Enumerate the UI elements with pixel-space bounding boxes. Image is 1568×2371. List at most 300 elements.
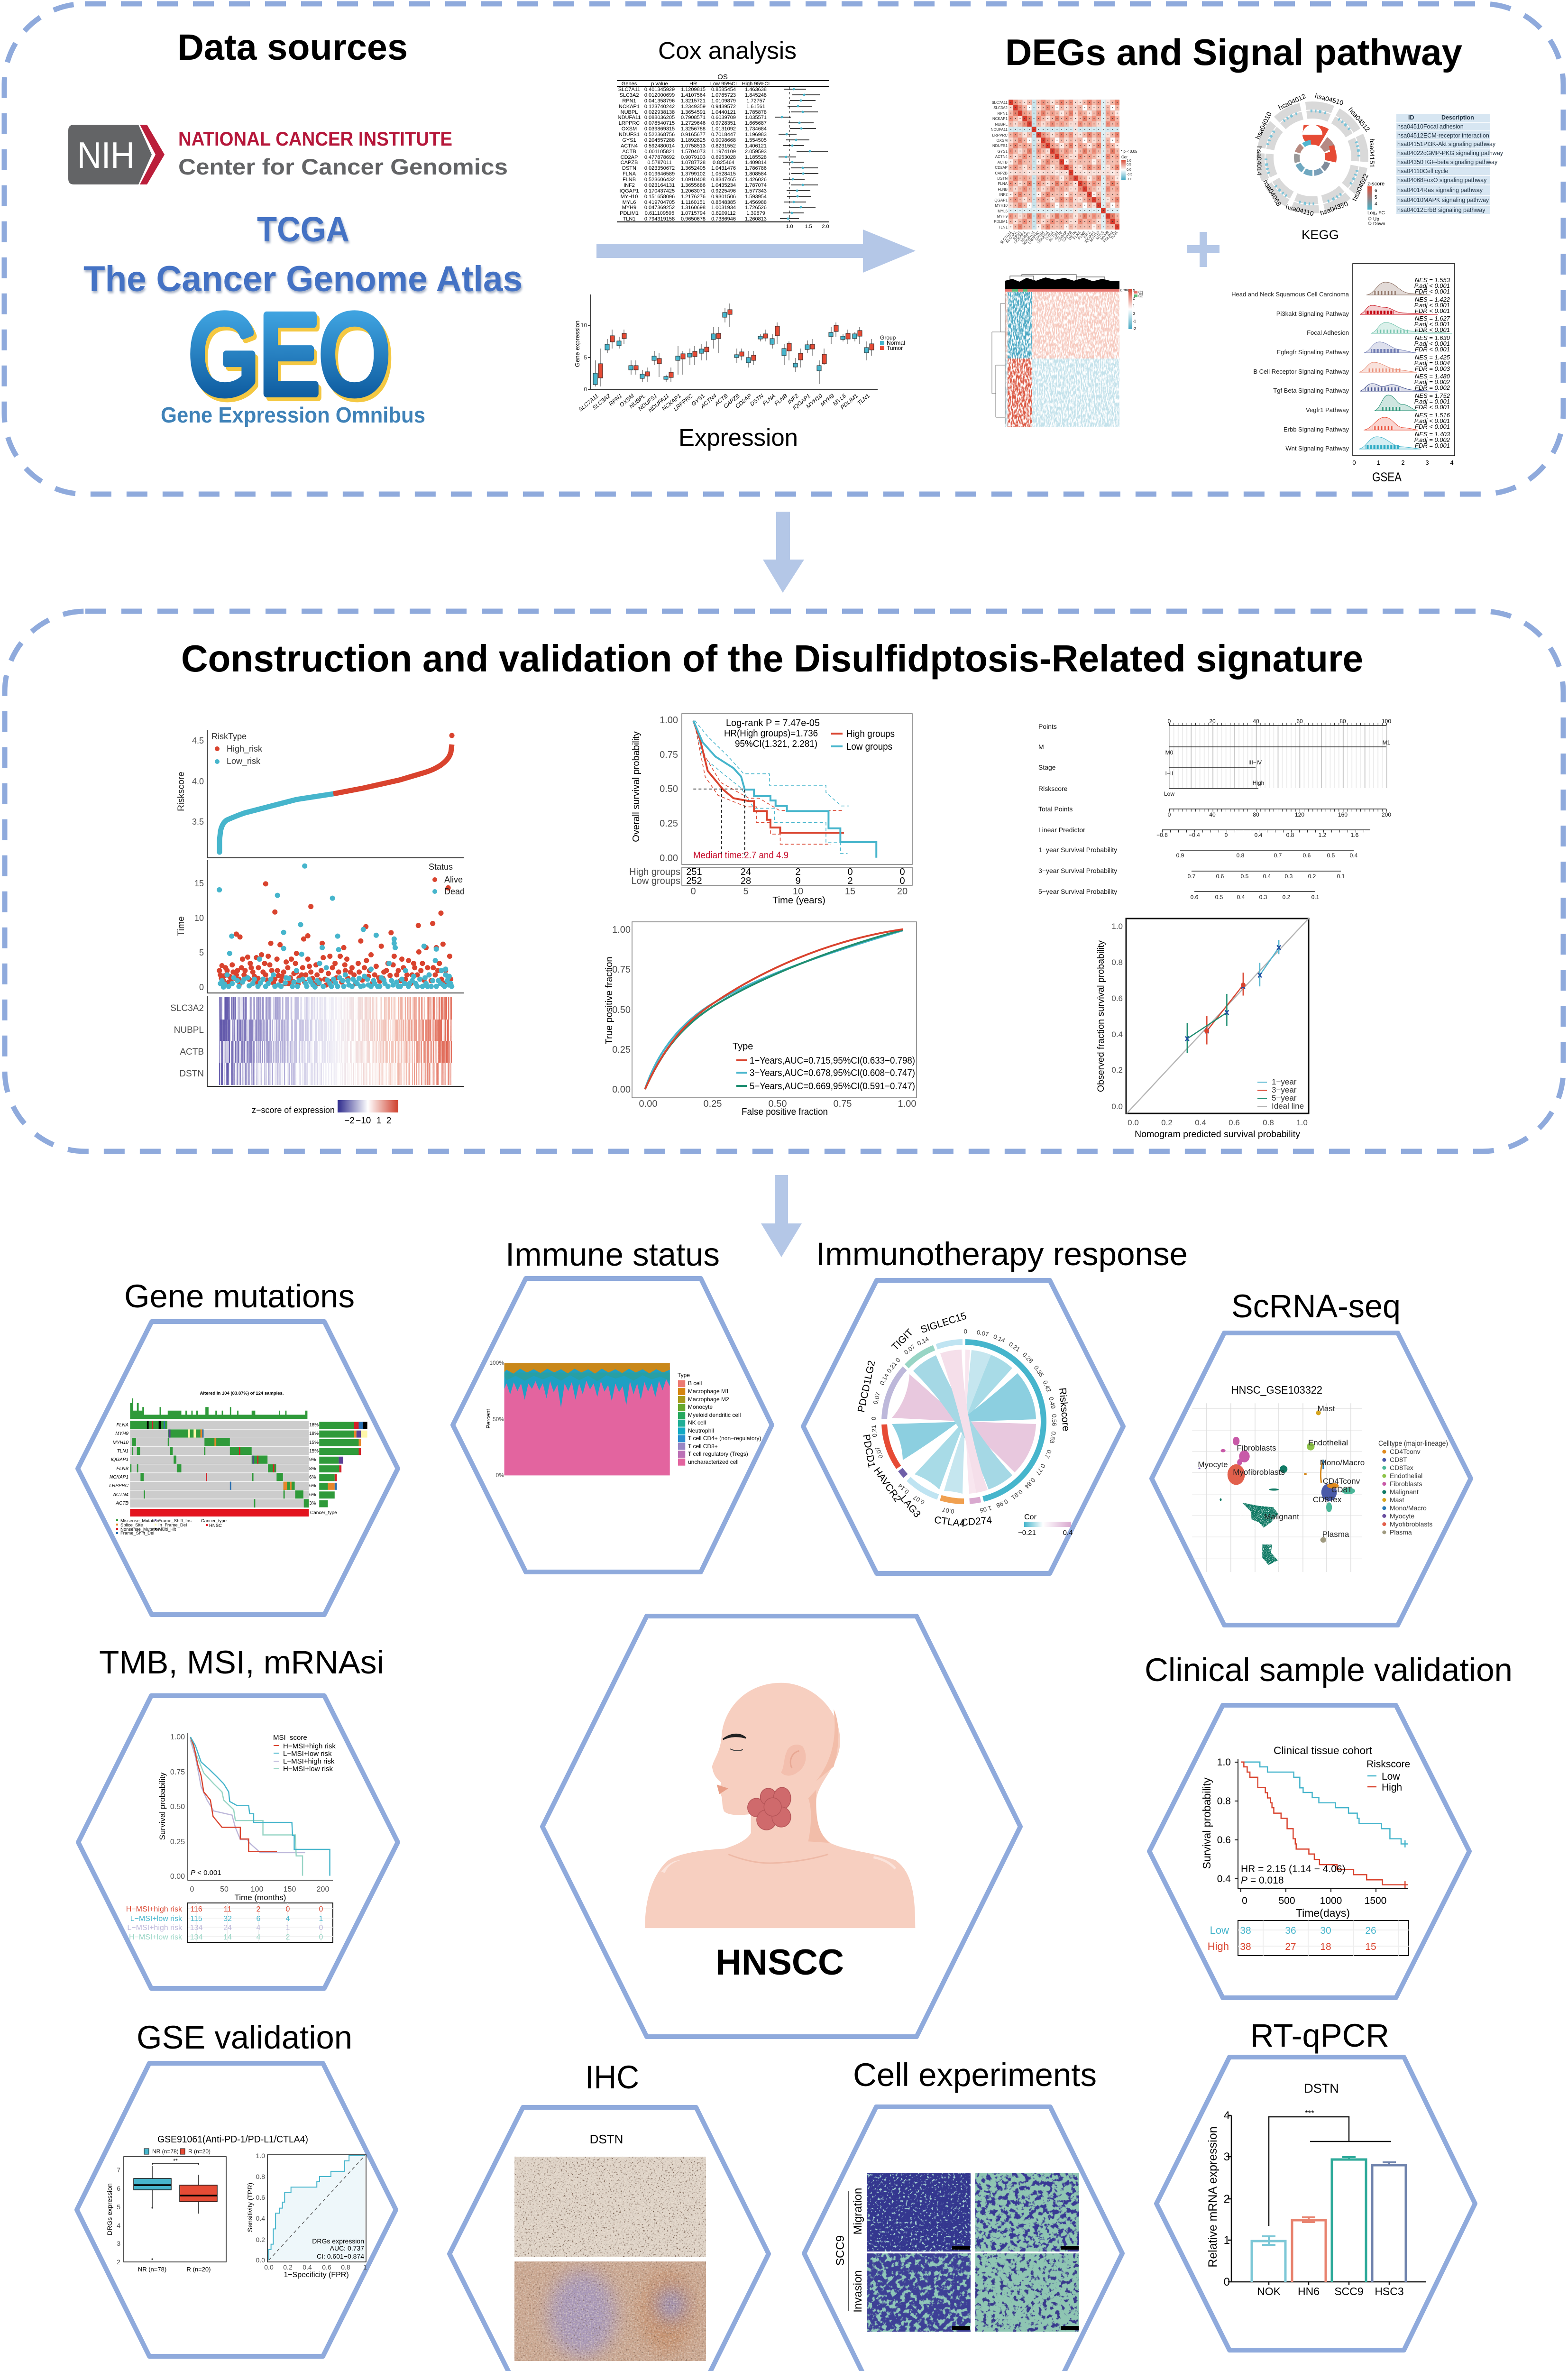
heading: Immune status [505,1236,720,1273]
chart: clustered expression heatmap: C1 [1138,290,1144,294]
table: Cox forest plot: 0.8209112 [711,211,736,216]
chart: riskscore curve: Low_risk [227,756,261,766]
chart: clustered expression heatmap [992,275,1144,427]
table: Cox forest plot: 0.9650678 [681,216,706,222]
chart: Kaplan-Meier overall survival: 1.00 [660,715,678,726]
chart: stacked immune composition: Myeloid dendritic cell [688,1412,741,1418]
chart: nomogram: 0.3 [1285,873,1293,880]
chart: MSI survival: Time (months) [235,1893,286,1902]
chart: GSEA ridge plot: Tgf Beta Signaling Pathway [1273,387,1349,394]
chart: GSEA ridge plot: P.adj = 0.004 [1414,359,1450,367]
chart: MSI survival: L−MSI+low risk [283,1750,332,1758]
chart: expression box plot: LRPPRC [672,392,694,413]
chart: Kaplan-Meier overall survival: HR(High groups)=1.736 [724,728,818,739]
chart: oncoplot: Altered in 104 (83.87%) of 124 samples. [200,1391,284,1396]
table: Cox forest plot: ACTN4 [621,143,638,149]
panel: HNSCC centre [542,1616,1020,2037]
chart: correlation heatmap: OXSM [1034,230,1045,241]
chart: survival time scatter: Time [176,916,186,936]
chart: MSI survival: 0.00 [170,1873,185,1881]
heading: TMB, MSI, mRNAsi [99,1644,384,1681]
chart: GSEA ridge plot: NES = 1.425 [1415,354,1450,361]
image: high staining tissue [514,2261,706,2361]
chart: nomogram: Riskscore [1038,785,1068,792]
chart: UMAP clusters: Plasma [1390,1528,1412,1536]
chart: UMAP clusters: Fibroblasts [1237,1443,1276,1452]
chart: clinical cohort survival: P = 0.018 [1241,1875,1284,1886]
chart: chord diagram: 0.21 [1008,1341,1021,1353]
table: KEGG pathways: Description [1441,114,1474,121]
table: Cox forest plot: ACTB [622,149,636,155]
arrow: down to signature panel [763,512,804,593]
chart: nomogram: Stage [1038,763,1056,771]
chart: nomogram: Linear Predictor [1038,826,1085,834]
chart: KEGG circle plot [1254,92,1385,227]
chart: nomogram: 0 [1168,718,1171,725]
chart: chord diagram: PDCD1 [861,1434,877,1469]
table: Cox forest plot: 0.7908571 [681,115,706,120]
table: Cox forest plot: 1.61561 [746,104,765,110]
chart: GSEA ridge plot: P.adj = 0.002 [1414,378,1450,386]
chart: correlation heatmap: CD2AP [1056,230,1068,243]
chart: MSI survival: 1.00 [170,1733,185,1741]
logo text: TCGA [83,210,523,299]
table: Cox forest plot: 0.019646589 [644,171,675,177]
chart: correlation heatmap: TLN1 [1110,230,1119,240]
chart: UMAP clusters: CD4Tconv [1323,1477,1360,1486]
hexagon frame [78,1696,398,1988]
table: Cox forest plot: NDUFS1 [619,132,640,138]
chart: nomogram: Low [1164,790,1174,797]
chart: GSEA ridge plot: FDR < 0.001 [1415,423,1450,430]
chart: GSE91061 box plot and ROC: AUC: 0.737 [330,2244,364,2252]
chart: KEGG circle plot: 6 [1375,188,1377,193]
chart: expression stripe heatmap: SLC3A2 [170,1003,204,1013]
table: Cox forest plot: 1.0031934 [711,205,736,211]
chart: GSE91061 box plot and ROC: GSE91061(Anti-PD-1/PD-L1/CTLA4) [157,2134,308,2145]
chart: clinical cohort survival: High [1382,1782,1402,1793]
chart: DSTN relative expression: NOK [1257,2285,1281,2297]
chart: calibration curve: 0.6 [1229,1118,1240,1127]
logo: NIH National Cancer Institute: NIH [77,134,135,176]
chart: oncoplot: Cancer_type [310,1510,337,1516]
chart: DSTN relative expression: DSTN [1304,2081,1339,2095]
chart: DSTN relative expression [1206,2081,1426,2297]
table: Cox forest plot: 1.5 [805,224,812,230]
hexagon frame [803,1280,1123,1573]
chart: nomogram: M1 [1383,739,1391,746]
image: transwell assay grid: Migration [852,2188,864,2234]
chart: expression box plot: ACTB [713,393,729,408]
chart: Kaplan-Meier overall survival: 0.75 [660,750,678,760]
chart: MSI survival: Survival probability [158,1772,167,1840]
chart: chord diagram: 0.07 [874,1446,884,1460]
chart: time-dependent ROC [604,922,917,1117]
table: Cox forest plot: 1.593954 [745,194,767,200]
table: Cox forest plot: TLN1 [623,216,635,222]
heading: DEGs and Signal pathway: DEGs and Signal pathway [1005,31,1462,73]
chart: GSEA ridge plot: FDR = 0.003 [1415,365,1450,372]
table: Cox forest plot: 0.9728351 [711,120,736,126]
chart: clinical cohort survival: 15 [1365,1941,1376,1952]
table: Cox forest plot: 0.794319158 [644,216,675,222]
label: Expression: Expression [679,424,798,451]
chart: MSI survival: 14 [223,1933,232,1941]
table: Cox forest plot: 1.4107564 [681,92,706,98]
table: Cox forest plot: 0.9165677 [681,132,706,138]
chart: riskscore curve: 4.0 [192,777,204,786]
chart: chord diagram: −0.21 [1018,1529,1036,1537]
chart: time-dependent ROC: 3−Years,AUC=0.678,95%CI(0.608−0.747) [750,1068,915,1078]
chart: oncoplot [109,1391,367,1536]
chart: GSE91061 box plot and ROC: CI: 0.601−0.874 [317,2252,364,2260]
chart: KEGG circle plot: 5 [1375,195,1377,200]
chart: GSE91061 box plot and ROC: ** [173,2158,178,2164]
chart: correlation heatmap: DSTN [997,176,1008,181]
heading: ScRNA-seq [1231,1288,1401,1324]
chart: UMAP clusters: Mono/Macro [1320,1458,1365,1467]
chart: GSE91061 box plot and ROC [106,2134,367,2279]
panel: data sources and DEGs [4,4,1563,494]
chart: oncoplot: 6% [309,1492,316,1498]
table: Cox forest plot: Genes [622,81,637,87]
chart: nomogram: −0.8 [1156,832,1168,838]
chart: GSEA ridge plot: P.adj = 0.002 [1414,436,1450,443]
table: Cox forest plot: 1.3799102 [681,171,706,177]
table: Cox forest plot: SLC3A2 [620,92,639,98]
chart: oncoplot: HNSC [209,1523,222,1528]
chart: expression stripe heatmap: DSTN [179,1069,204,1079]
chart: expression box plot: CAPZB [722,393,741,410]
chart: MSI survival: 32 [223,1915,232,1923]
heading: RT-qPCR [1250,2017,1389,2054]
chart: clustered expression heatmap: 2 [1133,296,1135,301]
table: Cox forest plot: 1.3160698 [681,205,706,211]
chart: correlation heatmap: NUBPL [1019,230,1031,243]
legend: z-score of expression: −2 [344,1116,355,1126]
chart: clinical cohort survival: High [1208,1940,1229,1952]
chart: correlation heatmap: 1.0 [1127,159,1131,163]
chart: Kaplan-Meier overall survival [629,714,912,906]
chart: expression box plot: IQGAP1 [791,393,812,411]
chart: GSEA ridge plot: P.adj < 0.001 [1414,340,1450,347]
table: Cox forest plot: 1.0440121 [711,110,736,115]
chart: GSE91061 box plot and ROC: NR (n=78) [152,2148,179,2155]
chart: nomogram: 0.6 [1303,852,1311,859]
chart: expression box plot: NCKAP1 [660,393,682,412]
chart: UMAP clusters: Endothelial [1390,1472,1422,1480]
chart: stacked immune composition: Monocyte [688,1404,713,1410]
chart: GSEA ridge plot: Focal Adhesion [1307,329,1349,336]
chart: correlation heatmap: LRPPRC [1027,230,1041,245]
chart: GSEA ridge plot: 4 [1450,459,1454,466]
label: HNSCC: HNSCC [715,1942,844,1983]
chart: correlation heatmap: MYL6 [1095,230,1105,240]
chart: nomogram: 3−year Survival Probability [1038,867,1117,874]
chart: stacked immune composition: Type [678,1372,690,1378]
heading: Construction and validation: Construction and validation of the Disulfidptosis-Related signature [181,637,1363,680]
chart: Kaplan-Meier overall survival: 0.25 [660,818,678,829]
chart: clinical cohort survival: 30 [1320,1925,1331,1936]
table: Cox forest plot: 1.2063071 [681,188,706,194]
chart: nomogram: 0.2 [1308,873,1316,880]
logo: NIH National Cancer Institute [68,125,508,184]
chart: oncoplot: 15% [309,1440,319,1445]
chart: calibration curve: 0.6 [1111,994,1123,1003]
chart: calibration curve: 0.2 [1161,1118,1173,1127]
chart: GSE91061 box plot and ROC: 0.6 [322,2263,331,2271]
chart: nomogram: 0.5 [1241,873,1249,880]
chart: MSI survival: L−MSI+high risk [127,1924,183,1932]
chart: chord diagram: 0.07 [903,1343,917,1356]
chart: time-dependent ROC: 0.00 [639,1099,657,1109]
chart: time-dependent ROC: 1.00 [612,925,631,935]
table: KEGG pathways: hsa04012ErbB signaling pathway [1397,207,1485,213]
chart: stacked immune composition: Macrophage M2 [688,1396,729,1403]
chart: GSE91061 box plot and ROC: 0.0 [256,2256,265,2264]
table: Cox forest plot: 0.170437425 [644,188,675,194]
table: KEGG pathways: hsa04014Ras signaling pathway [1397,187,1483,193]
chart: calibration curve: 0.0 [1128,1118,1139,1127]
chart: nomogram: 0.2 [1283,894,1291,901]
table: Cox forest plot: 1.196983 [745,132,767,138]
chart: expression box plot: 5 [584,354,587,361]
chart: oncoplot: 18% [309,1423,319,1428]
chart: correlation heatmap: FLNA [998,182,1008,186]
chart: MSI survival: H−MSI+low risk [129,1933,183,1941]
chart: calibration curve: 1.0 [1296,1118,1308,1127]
table: Cox forest plot: NCKAP1 [619,104,640,110]
chart: survival time scatter: 10 [194,913,204,923]
chart: survival time scatter: Status [429,862,453,872]
chart: MSI survival: H−MSI+high risk [283,1742,336,1750]
chart: correlation heatmap: 0.5 [1127,163,1131,166]
table: Cox forest plot [617,73,829,230]
chart: oncoplot: 3% [309,1501,316,1506]
table: Cox forest plot: RPN1 [622,98,636,104]
chart: nomogram: 0.3 [1259,894,1267,901]
panel: RT-qPCR [1156,2017,1475,2350]
chart: expression box plot: INF2 [786,392,800,405]
chart: GSEA ridge plot: 3 [1425,459,1429,466]
chart: nomogram: 0.8 [1286,832,1294,838]
chart: correlation heatmap: NUBPL [995,122,1008,127]
chart: MSI survival: 0.75 [170,1768,185,1776]
chart: chord diagram: Riskscore [1057,1388,1072,1432]
chart: oncoplot: Frame_Shift_Ins [158,1518,192,1524]
chart: stacked immune composition: NK cell [688,1419,706,1426]
chart: nomogram: 0.4 [1237,894,1245,901]
table: Cox forest plot: 0.023350672 [644,165,675,171]
hexagon frame [77,2063,396,2356]
chart: time-dependent ROC: 0.25 [704,1099,722,1109]
chart: correlation heatmap: INF2 [1082,230,1091,239]
panel: clinical sample validation [1145,1652,1513,1998]
logo: GEO Gene Expression Omnibus: GEO [192,294,393,422]
chart: UMAP clusters: Mast [1318,1404,1335,1413]
chart: correlation heatmap: MYL6 [998,209,1008,213]
chart: UMAP clusters: Myocyte [1390,1512,1414,1520]
table: Cox forest plot: 0.022938138 [644,110,675,115]
chart: DSTN relative expression: 1 [1224,2234,1230,2247]
table: Cox forest plot: MYH10 [621,194,638,200]
chart: UMAP clusters: HNSC_GSE103322 [1231,1384,1322,1396]
chart: MSI survival: 134 [190,1933,202,1941]
chart: MSI survival: 24 [223,1924,232,1932]
chart: GSEA ridge plot: 2 [1401,459,1405,466]
chart: stacked immune composition: 100% [489,1360,504,1366]
table: Cox forest plot: OS [717,73,728,81]
chart: clinical cohort survival: Riskscore [1366,1759,1410,1770]
chart: nomogram: 40 [1253,718,1259,725]
table: Cox forest plot: 0.204557288 [644,138,675,143]
hexagon frame [804,2107,1122,2371]
chart: DSTN relative expression: HSC3 [1375,2285,1404,2297]
chart: oncoplot: ACTB [115,1501,128,1506]
panel: GSE validation [77,2019,396,2356]
chart: clustered expression heatmap: 0 [1133,312,1135,316]
chart: MSI survival: 200 [317,1885,329,1893]
table: Cox forest plot: 0.9079103 [681,155,706,160]
table: Cox forest plot: 1.3654591 [681,110,706,115]
table: Cox forest plot: 1.0131092 [711,126,736,132]
label: KEGG: KEGG [1302,228,1339,242]
chart: nomogram: High [1253,780,1264,786]
chart: chord diagram: 0.63 [1048,1431,1057,1444]
chart: expression stripe heatmap [170,996,464,1086]
chart: clinical cohort survival: Survival probability [1201,1777,1213,1869]
chart: correlation heatmap: CAPZB [995,171,1008,175]
table: Cox forest plot: 1.726526 [745,205,767,211]
chart: GSE91061 box plot and ROC: R (n=20) [187,2266,211,2273]
chart: KEGG circle plot: Up [1373,217,1379,222]
chart: clinical cohort survival: 18 [1320,1941,1331,1952]
table: KEGG pathways: hsa04068FoxO signaling pathway [1397,177,1487,184]
chart: chord diagram: 0.14 [897,1482,910,1496]
chart: GSEA ridge plot [1231,264,1455,466]
table: Cox forest plot: SLC7A11 [618,87,640,92]
table: Cox forest plot: 0.6953028 [711,155,736,160]
table: KEGG pathways: hsa04512ECM-receptor interaction [1397,132,1489,139]
chart: time-dependent ROC: 0.25 [612,1045,631,1055]
table: Cox forest plot: PDLIM1 [620,211,639,216]
chart: MSI survival: 150 [284,1885,296,1893]
chart: GSEA ridge plot: NES = 1.553 [1415,276,1450,284]
chart: KEGG circle plot: hsa04350 [1319,200,1349,217]
chart: nomogram: 0.6 [1216,873,1224,880]
chart: Kaplan-Meier overall survival: Median time:2.7 and 4.9 [693,850,789,861]
chart: clinical cohort survival: 0.4 [1217,1874,1231,1884]
chart: stacked immune composition: B cell [688,1380,702,1387]
chart: oncoplot: MYH9 [115,1431,128,1436]
chart: time-dependent ROC: 5−Years,AUC=0.669,95%CI(0.591−0.747) [750,1081,915,1092]
chart: KEGG circle plot: hsa04010 [1254,110,1273,140]
chart: Kaplan-Meier overall survival: 0 [847,867,853,877]
label: DSTN: DSTN [590,2132,623,2146]
table: Cox forest plot: INF2 [624,183,635,188]
chart: calibration curve: 0.4 [1195,1118,1206,1127]
chart: MSI survival: 4 [257,1924,261,1932]
table: Cox forest plot: OXSM [622,126,637,132]
chart: UMAP clusters: Fibroblasts [1390,1480,1422,1488]
table: Cox forest plot: 1.554505 [745,138,767,143]
chart: calibration curve: Observed fraction survival probability [1096,940,1106,1092]
chart: GSEA ridge plot: Egfegfr Signaling Pathway [1277,349,1349,356]
chart: chord diagram: 0.21 [885,1360,898,1374]
chart: expression box plot: NUBPL [628,393,647,410]
chart: MSI survival: H−MSI+high risk [126,1905,183,1913]
chart: correlation heatmap: IQGAP1 [1083,230,1096,244]
chart: MSI survival [126,1733,336,1942]
chart: nomogram: III−IV [1248,759,1262,766]
chart: MSI survival: 115 [190,1915,202,1923]
chart: chord diagram: 0 [964,1328,967,1335]
chart: correlation heatmap: FLNA [1072,230,1082,240]
chart: oncoplot: LRPPRC [109,1483,129,1489]
table: Cox forest plot: 1.406121 [745,143,767,149]
chart: nomogram: 1.6 [1351,832,1359,838]
chart: chord diagram: 0.07 [871,1392,882,1405]
chart: Kaplan-Meier overall survival: 252 [686,876,702,886]
chart: survival time scatter: 0 [199,983,204,992]
chart: nomogram: 1.2 [1319,832,1327,838]
chart: KEGG circle plot: hsa04510 [1314,92,1344,107]
illustration: head and neck tumour [645,1683,915,1928]
table: Cox forest plot: GYS1 [622,138,636,143]
chart: calibration curve: 5−year [1272,1094,1297,1103]
table: Cox forest plot: 1.0431476 [711,165,736,171]
table: Cox forest plot: 0.8347465 [711,177,736,183]
chart: expression box plot: CD2AP [734,393,753,410]
chart: nomogram: 120 [1295,811,1304,818]
chart: riskscore curve: RiskType [211,732,247,741]
chart: correlation heatmap: PDLIM1 [994,220,1008,224]
chart: GSEA ridge plot: FDR < 0.001 [1415,326,1450,333]
table: Cox forest plot: 1.3655686 [681,183,706,188]
chart: GSEA ridge plot: P.adj < 0.001 [1414,282,1450,289]
chart: chord diagram: 0.4 [1063,1529,1073,1537]
table: Cox forest plot: CAPZB [621,160,638,165]
chart: correlation heatmap: -1.0 [1127,178,1132,181]
table: Cox forest plot: 0.041358796 [644,98,675,104]
chart: oncoplot: Cancer_type [201,1518,227,1524]
table: Cox forest plot: 1.785878 [745,110,767,115]
chart: MSI survival: 2 [286,1933,290,1941]
chart: MSI survival: 100 [251,1885,263,1893]
chart: DSTN relative expression: *** [1305,2109,1314,2118]
chart: expression box plot: NDUFA11 [647,393,670,414]
chart: expression box plot: Gene expression [574,321,581,367]
chart: stacked immune composition: T cell CD8+ [688,1443,718,1450]
chart: Kaplan-Meier overall survival: 10 [793,886,803,897]
chart: nomogram: 60 [1296,718,1303,725]
chart: correlation heatmap: 0.0 [1127,168,1131,172]
chart: nomogram: 0 [1168,811,1171,818]
chart: chord diagram: 0.77 [1034,1462,1047,1477]
chart: MSI survival: 0 [190,1885,194,1893]
chart: GSE91061 box plot and ROC: NR (n=78) [138,2266,166,2273]
chart: GSE91061 box plot and ROC: 0.8 [341,2263,350,2271]
table: Cox forest plot: 1.456988 [745,200,767,205]
chart: riskscore curve: 4.5 [192,736,204,745]
legend: z-score of expression [252,1100,398,1126]
chart: time-dependent ROC: 0.75 [834,1099,852,1109]
chart: MSI survival: 0.25 [170,1838,185,1846]
chart: MSI survival: 0 [319,1933,323,1941]
chart: nomogram: 0.4 [1263,873,1271,880]
chart: time-dependent ROC: 1.00 [898,1099,916,1109]
chart: Kaplan-Meier overall survival: 251 [686,867,702,877]
